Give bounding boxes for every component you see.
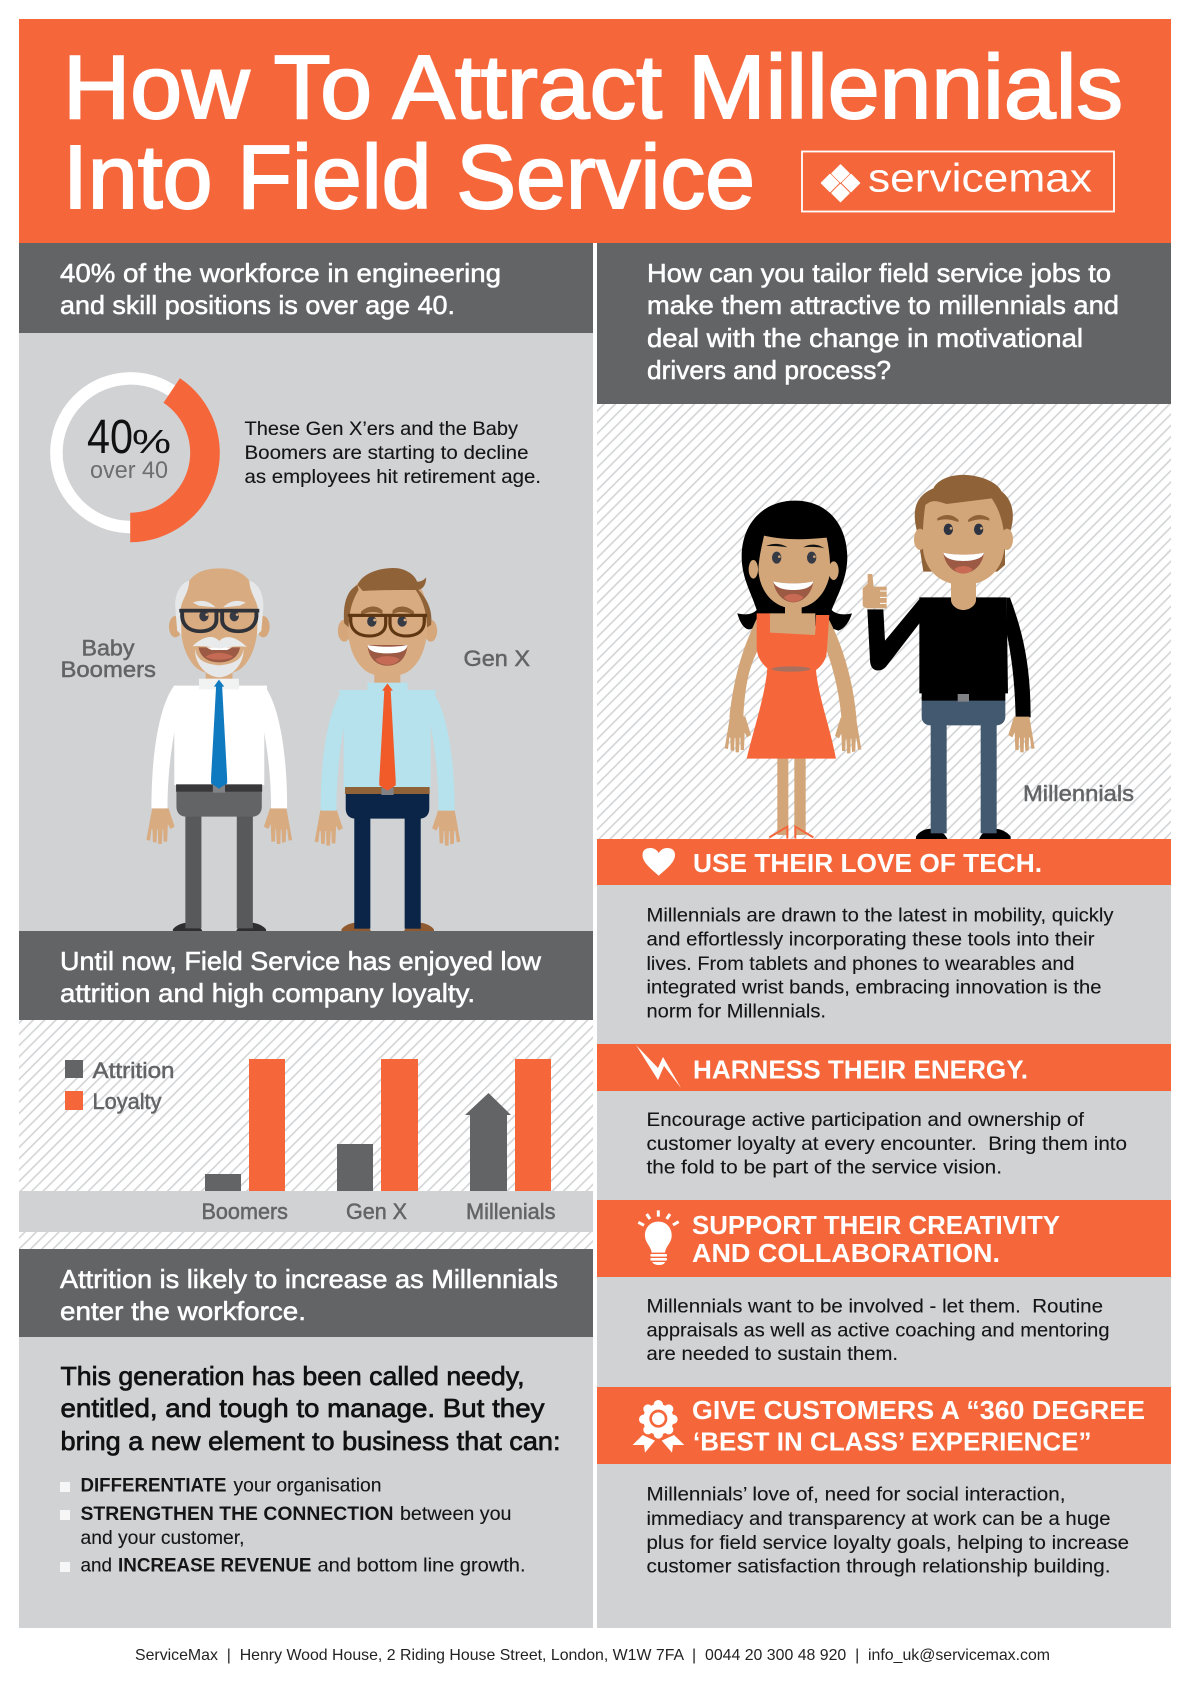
heading: attrition likely to increase [19, 1249, 593, 1337]
text block: decline note [244, 418, 541, 488]
text block: energy [646, 1109, 1127, 1178]
bars: Boomers: Boomers [202, 1199, 288, 1224]
panel: workforce age background [19, 333, 593, 931]
chart: 40 percent donut [56, 378, 220, 542]
text block: love of tech [646, 904, 1114, 1022]
list: business benefits: and bottom line growth. [318, 1554, 526, 1576]
text block: creativity: Millennials want to be involved - let them. Routine [646, 1296, 1103, 1318]
heading: tailor field service jobs: How can you tailor field service jobs to [647, 258, 1111, 288]
heading: low attrition: attrition and high company loyalty. [60, 978, 475, 1008]
panel: attrition vs loyalty chart [19, 1020, 593, 1249]
panel: use their love of tech: USE THEIR LOVE OF TECH. [693, 848, 1042, 878]
text block: generation description: bring a new element to business that can: [60, 1426, 560, 1456]
label: Millennials: Millennials [1023, 781, 1134, 806]
heading: workforce over 40: and skill positions is over age 40. [60, 290, 455, 320]
list: business benefits [60, 1474, 526, 1576]
panel: harness their energy [597, 1044, 1171, 1200]
text block: creativity: appraisals as well as active coaching and mentoring [646, 1320, 1110, 1342]
text block: energy: Encourage active participation and ownership of [646, 1109, 1085, 1131]
text block: energy: customer loyalty at every encounter. Bring them into [646, 1133, 1127, 1155]
panel: best in class experience: ‘BEST IN CLASS’ EXPERIENCE” [693, 1426, 1092, 1456]
logo: servicemax: servicemax [868, 156, 1092, 200]
bars: Gen X [337, 1059, 418, 1224]
label: Baby Boomers: Baby [82, 636, 134, 660]
text block: love of tech: integrated wrist bands, embracing innovation is the [646, 976, 1102, 998]
text block: social interaction: customer satisfaction through relationship building. [646, 1556, 1110, 1578]
heading: low attrition: Until now, Field Service has enjoyed low [60, 946, 541, 976]
legend [65, 1058, 174, 1114]
text block: decline note: Boomers are starting to decline [244, 442, 528, 464]
illustration: baby boomer [146, 568, 292, 933]
text block: love of tech: and effortlessly incorporating these tools into their [646, 928, 1095, 950]
list: business benefits: and your customer, [80, 1527, 244, 1549]
chart: 40 percent donut: % [132, 423, 171, 460]
bars: Gen X: Gen X [346, 1199, 407, 1224]
heading: workforce over 40 [19, 243, 593, 333]
bars: Millenials with rising arrow: Millenials [466, 1199, 556, 1224]
text block: generation description: This generation has been called needy, [60, 1361, 524, 1391]
text block: love of tech: lives. From tablets and phones to wearables and [646, 953, 1074, 975]
icon: lightning bolt [636, 1045, 681, 1088]
panel: use their love of tech [597, 839, 1171, 1044]
heading: tailor field service jobs: drivers and process? [647, 355, 891, 385]
illustration: gen x [315, 568, 460, 933]
heading: workforce over 40: 40% of the workforce in engineering [60, 258, 501, 288]
label: Baby Boomers [60, 636, 156, 682]
panel: support creativity: AND COLLABORATION. [692, 1238, 1000, 1268]
text block: social interaction: Millennials’ love of, need for social interaction, [646, 1484, 1066, 1506]
text block: social interaction [646, 1484, 1129, 1578]
title: How To Attract Millennials [63, 38, 1123, 138]
text block: love of tech: norm for Millennials. [646, 1000, 826, 1022]
legend: Loyalty [92, 1089, 162, 1114]
panel: best in class experience [597, 1387, 1171, 1628]
text block: creativity [646, 1296, 1110, 1365]
panel: best in class experience: GIVE CUSTOMERS A “360 DEGREE [692, 1395, 1145, 1425]
heading: tailor field service jobs: make them attractive to millennials and [647, 290, 1119, 320]
list: business benefits: between you [400, 1503, 512, 1525]
heading: tailor field service jobs [597, 243, 1171, 404]
icon: heart [642, 848, 675, 876]
bars: Millenials with rising arrow [465, 1059, 556, 1224]
panel: millennials illustration background [597, 404, 1171, 839]
logo: servicemax [802, 152, 1114, 212]
text block: energy: the fold to be part of the service vision. [646, 1156, 1002, 1178]
text block: decline note: as employees hit retirement age. [244, 466, 541, 488]
text block: generation description [60, 1361, 560, 1456]
text block: decline note: These Gen X’ers and the Baby [244, 418, 518, 440]
list: business benefits: INCREASE REVENUE [118, 1554, 312, 1576]
panel: harness their energy: HARNESS THEIR ENERGY. [693, 1054, 1028, 1084]
heading: tailor field service jobs: deal with the change in motivational [647, 323, 1083, 353]
illustration: millennial woman [725, 501, 861, 839]
panel: title banner [19, 19, 1171, 243]
panel: new element to business [19, 1337, 593, 1628]
label: Gen X: Gen X [464, 646, 530, 671]
text block: love of tech: Millennials are drawn to the latest in mobility, quickly [646, 904, 1114, 926]
panel: support creativity [597, 1200, 1171, 1387]
list: business benefits: and [80, 1554, 112, 1576]
title: Into Field Service [63, 128, 755, 228]
legend: Attrition [92, 1058, 174, 1083]
title [63, 38, 1123, 228]
icon: light bulb [638, 1210, 679, 1265]
list: business benefits: STRENGTHEN THE CONNECTION [80, 1503, 394, 1525]
illustration: millennial man [863, 475, 1035, 840]
text block: social interaction: plus for field service loyalty goals, helping to increase [646, 1532, 1129, 1554]
list: business benefits: DIFFERENTIATE [80, 1474, 226, 1496]
text block: creativity: are needed to sustain them. [646, 1343, 898, 1365]
label: Baby Boomers: Boomers [60, 657, 156, 682]
bars: Boomers [202, 1059, 288, 1224]
icon: award rosette [633, 1400, 684, 1453]
heading: attrition likely to increase: Attrition is likely to increase as Millennials [60, 1264, 558, 1294]
heading: attrition likely to increase: enter the workforce. [60, 1296, 306, 1326]
footer: contact details: ServiceMax | Henry Wood House, 2 Riding House Street, London, W1W 7FA | 0044 20 300 48 920 | info_uk@servicemax.com [135, 1647, 1050, 1664]
text block: social interaction: immediacy and transparency at work can be a huge [646, 1508, 1110, 1530]
heading: low attrition [19, 931, 593, 1020]
text block: generation description: entitled, and tough to manage. But they [60, 1393, 544, 1423]
list: business benefits: your organisation [234, 1474, 382, 1496]
panel: support creativity: SUPPORT THEIR CREATIVITY [692, 1210, 1060, 1240]
chart: 40 percent donut: over 40 [90, 457, 168, 484]
chart: 40 percent donut: 40 [87, 411, 133, 464]
